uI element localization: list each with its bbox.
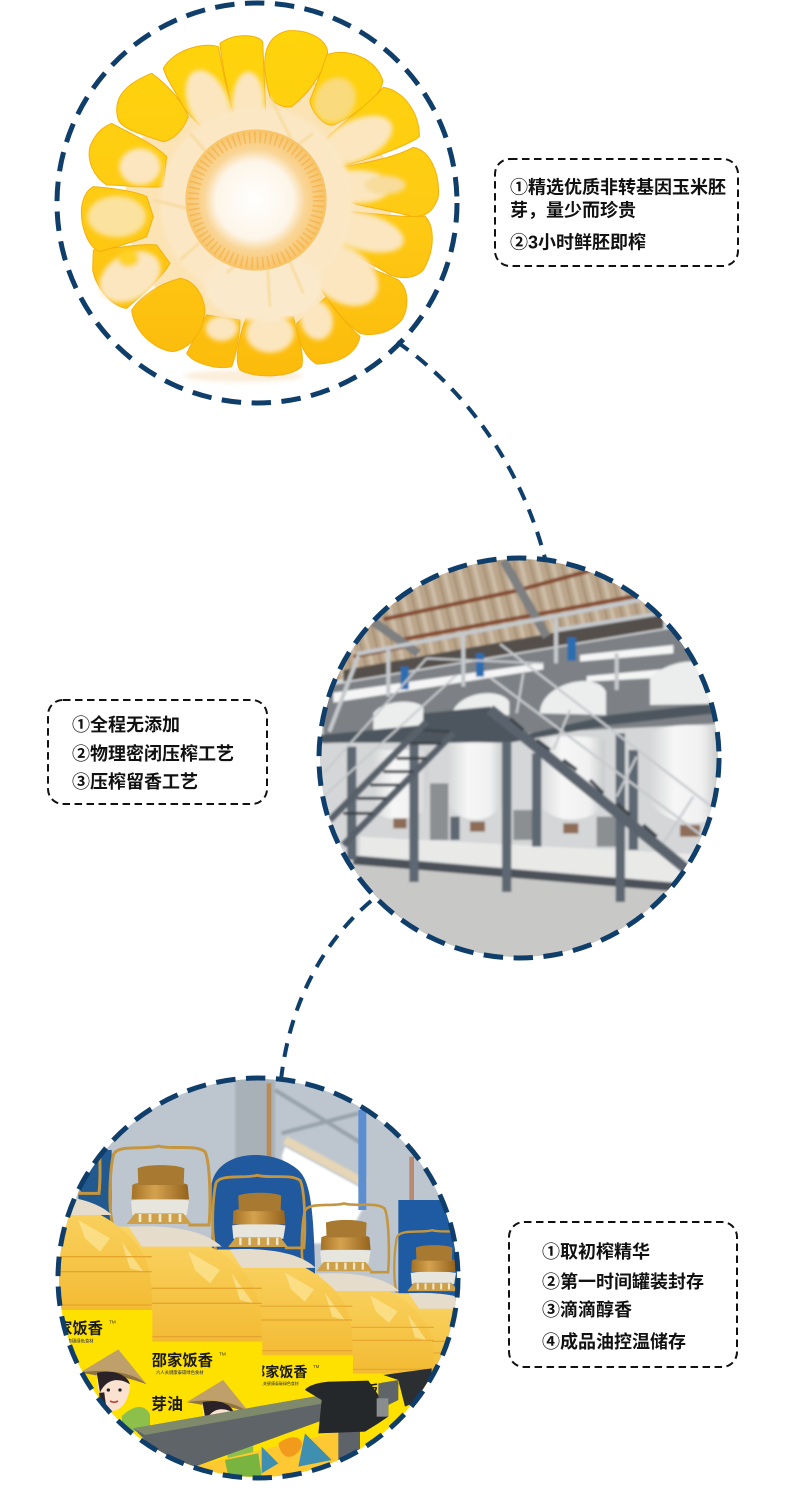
left staircase [323,658,543,845]
lower tanks [378,749,422,820]
woman illustration: bottle 1 [80,1349,150,1433]
blue tanks [212,1155,315,1274]
rail post [338,1430,360,1460]
bottle 2 [59,1144,262,1477]
kernel pale centres [87,63,408,353]
right staircase [490,644,712,869]
factory background [60,1079,457,1466]
callout: raw material: ②3小时鲜胚即榨 [510,232,646,252]
upper pipes [329,600,660,732]
bottle 4 [240,1203,434,1499]
bottle 5 [339,1229,456,1460]
callout: raw material [495,159,738,266]
bottom label art [193,1432,338,1477]
ring: factory circle [319,558,719,958]
conveyor rail [133,1395,323,1467]
roof [336,559,654,681]
callout: filling and storage: ④成品油控温储存 [542,1331,686,1352]
corn base reflection [183,370,303,382]
floor [352,864,667,957]
cob speckle [193,137,319,263]
ring: corn circle [57,3,457,403]
background light beams [234,1079,276,1158]
dark door and machinery [430,783,617,847]
callout: pressing process: ③压榨留香工艺 [72,771,198,792]
bottle 2 product text: 芽油 [151,1395,183,1413]
columns [352,733,633,902]
dark roof underside [343,613,663,682]
motors [401,637,576,689]
roof beams [353,571,647,657]
panel: bottle line photo [59,1079,457,1477]
corn cob core [185,129,327,271]
corn underlay [125,70,392,337]
upper tanks [373,661,710,732]
corn kernels [81,31,439,376]
upper wall band [323,620,723,743]
callout: filling and storage: ①取初榨精华 [542,1241,650,1262]
callout: filling and storage [509,1222,737,1367]
windows strip [333,645,710,703]
panel: corn cross-section photo [81,31,439,382]
callout: pressing process [48,700,267,804]
conveyor [360,837,693,883]
conveyor base [353,860,677,887]
roof trusses [373,560,547,653]
wall background [320,622,718,882]
connector: factory to bottles [281,901,371,1080]
callout: pressing process: ②物理密闭压榨工艺 [72,743,234,764]
callout: filling and storage: ③滴滴醇香 [542,1299,632,1320]
platform [320,703,715,743]
callout: raw material: ①精选优质非转基因玉米胚 [510,176,726,198]
rail clamps [305,1381,388,1433]
bottle 1 [59,1158,152,1439]
callout: raw material: 芽，量少而珍贵 [510,200,636,220]
panel: factory photo [320,559,718,957]
corn cob fibres [153,97,353,322]
callout: pressing process: ①全程无添加 [72,714,180,735]
bottle 3 [147,1175,353,1499]
ring: bottle circle [58,1078,458,1478]
tank outlets [393,818,700,837]
callout: filling and storage: ②第一时间罐装封存 [542,1271,704,1292]
connector: corn to factory [397,342,546,562]
woman illustration: bottle 2 [187,1380,253,1459]
